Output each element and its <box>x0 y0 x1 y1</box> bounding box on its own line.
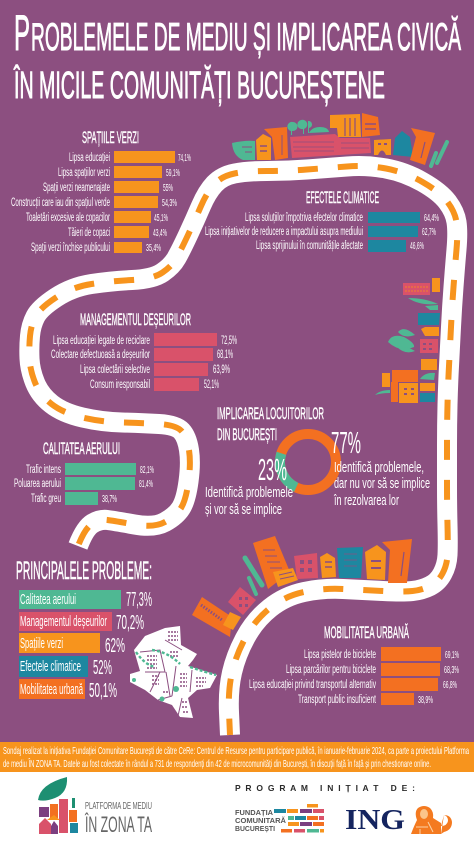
bar chart: Lipsa pistelor de biciclete <box>304 649 376 661</box>
bar chart: 63,9% <box>213 364 230 376</box>
bar chart: 43,4% <box>153 228 167 239</box>
bar chart: Lipsa parcărilor pentru biciclete <box>286 664 376 676</box>
bar chart: Tăieri de copaci <box>68 227 110 239</box>
stat 77%: Identifică problemele, <box>334 459 424 476</box>
bar chart: Lipsa educației <box>69 152 110 164</box>
bar chart: 62,7% <box>422 227 436 238</box>
bar chart <box>249 647 459 706</box>
stat 77%: 77% <box>331 425 361 460</box>
panel: Calitatea aerului <box>14 439 154 505</box>
bar chart: 35,4% <box>146 243 161 254</box>
bar chart: Lipsa educației legate de reciclare <box>53 335 150 347</box>
logo: Platforma de mediu în zona ta <box>38 777 152 837</box>
stat 77%: în rezolvarea lor <box>333 492 399 509</box>
bar: Spațiile verzi: 62% <box>105 635 125 657</box>
icon: leaf <box>38 777 67 801</box>
bar chart: 45,1% <box>154 213 168 224</box>
footer white area <box>0 772 474 842</box>
bar: Calitatea aerului: Calitatea aerului <box>20 592 76 608</box>
bar chart: 68,1% <box>217 349 233 361</box>
bar chart <box>11 151 191 254</box>
bar chart: Toaletări excesive ale copacilor <box>26 212 110 224</box>
bar chart: Trafic greu <box>31 493 61 505</box>
title <box>13 5 461 107</box>
bar: Managementul deșeurilor: Managementul deșeurilor <box>20 614 107 630</box>
bar chart: Spații verzi neamenajate <box>43 182 110 194</box>
bar chart: Lipsa soluțiilor împotriva efectelor climatice <box>245 212 363 224</box>
donut chart <box>271 425 345 499</box>
panel: Principalele probleme: 70,2% <box>116 612 144 634</box>
panel: Efectele climatice <box>205 188 439 252</box>
logo: ING <box>345 804 452 836</box>
logo: Fundația Comunitară București: BUCUREȘTI <box>235 824 275 833</box>
text: 82,1% <box>140 465 154 476</box>
panel: Principalele probleme: 52% <box>93 657 112 679</box>
buildings along the top of the road <box>232 113 447 166</box>
stat 23%: Identifică problemele <box>205 484 293 501</box>
bar: Managementul deșeurilor <box>19 612 144 634</box>
logo: Fundația Comunitară București: COMUNITARĂ <box>235 816 287 825</box>
bar chart: Trafic intens <box>26 464 61 476</box>
logo: ING: ING <box>345 804 405 836</box>
title: P <box>14 5 30 61</box>
bar chart: 81,4% <box>139 479 153 490</box>
bar chart: 38,7% <box>102 494 117 505</box>
logo: Fundația Comunitară București <box>235 804 324 833</box>
text: PRINCIPALELE PROBLEME: <box>16 557 152 585</box>
buildings along the bottom of the road <box>192 536 412 637</box>
illustrated map of Bucharest <box>130 626 217 718</box>
icon: lion <box>411 806 452 834</box>
bar chart: Lipsa spațiilor verzi <box>58 167 110 179</box>
bar chart: Lipsa educației privind transportul alternativ <box>249 679 376 691</box>
methodology note band <box>0 742 474 772</box>
bar chart: Spații verzi închise publicului <box>31 242 110 254</box>
panel: Implicarea locuitorilor: IMPLICAREA LOCUITORILOR <box>217 404 324 423</box>
text: 74,1% <box>178 153 191 164</box>
bar chart: 64,4% <box>424 213 439 224</box>
bar chart: Lipsa colectării selective <box>80 364 150 376</box>
stat 23%: și vor să se implice <box>205 501 282 518</box>
bar chart: Construcții care iau din spațiul verde <box>11 197 110 209</box>
bar chart: 55% <box>163 183 173 194</box>
bar chart: Transport public insuficient <box>298 694 376 706</box>
bar chart <box>51 333 237 391</box>
bar chart <box>205 212 439 252</box>
panel: Mobilitatea urbană <box>249 623 459 706</box>
bar chart <box>14 463 154 505</box>
panel: Calitatea aerului: CALITATEA AERULUI <box>43 439 120 458</box>
bar: Calitatea aerului <box>19 589 152 611</box>
logo: Fundația Comunitară București: FUNDAȚIA <box>235 808 274 817</box>
bar: Spațiile verzi <box>19 633 125 657</box>
icon: houses <box>39 798 78 834</box>
bar chart: Poluarea aerului <box>14 478 61 490</box>
text: 72,5% <box>221 335 237 347</box>
panel: Managementul deșeurilor <box>51 310 237 391</box>
panel: Managementul deșeurilor: MANAGEMENTUL DEȘEURILOR <box>80 310 191 329</box>
text: 77,3% <box>126 589 152 611</box>
panel: Principalele probleme: 50,1% <box>89 680 117 702</box>
bar: Mobilitatea urbană <box>19 679 117 702</box>
panel: Spațiile verzi <box>11 128 191 254</box>
bar chart: Colectare defectuoasă a deșeurilor <box>51 349 150 361</box>
panel: Principalele probleme <box>16 557 152 702</box>
stat 77% <box>331 425 430 509</box>
bar chart: 66,8% <box>443 680 457 691</box>
winding road <box>29 166 457 735</box>
bar chart: Consum iresponsabil <box>90 379 150 391</box>
bar: Mobilitatea urbană: Mobilitatea urbană <box>20 682 83 698</box>
panel: Implicarea locuitorilor: DIN BUCUREȘTI <box>217 425 277 444</box>
bar chart: 38,9% <box>418 695 433 706</box>
bar chart: 54,3% <box>162 198 177 209</box>
bar: Efectele climatice: Efectele climatice <box>20 659 81 675</box>
bar chart: 52,1% <box>204 379 219 391</box>
panel: Implicarea locuitorilor <box>205 404 430 518</box>
program heading: P R O G R A M I N I Ț I A T D E : <box>235 783 415 793</box>
logo: Platforma de mediu în zona ta: PLATFORMA DE MEDIU <box>85 801 152 812</box>
text: 69,1% <box>445 650 459 661</box>
bar: Efectele climatice <box>19 656 112 679</box>
logo: Platforma de mediu în zona ta: ÎN ZONA TA <box>84 812 152 837</box>
stat 23%: 23% <box>258 452 287 487</box>
stat 23% <box>205 452 293 518</box>
bar chart: Lipsa sprijinului în comunitățile afectate <box>256 240 363 252</box>
bar chart: 59,1% <box>166 168 180 179</box>
buildings along the right of the road <box>375 278 440 403</box>
panel: Spațiile verzi: SPAȚIILE VERZI <box>82 128 139 147</box>
bar chart: 68,3% <box>444 665 459 676</box>
bar chart: 46,6% <box>410 241 424 252</box>
bar: Spațiile verzi: Spațiile verzi <box>20 636 63 652</box>
